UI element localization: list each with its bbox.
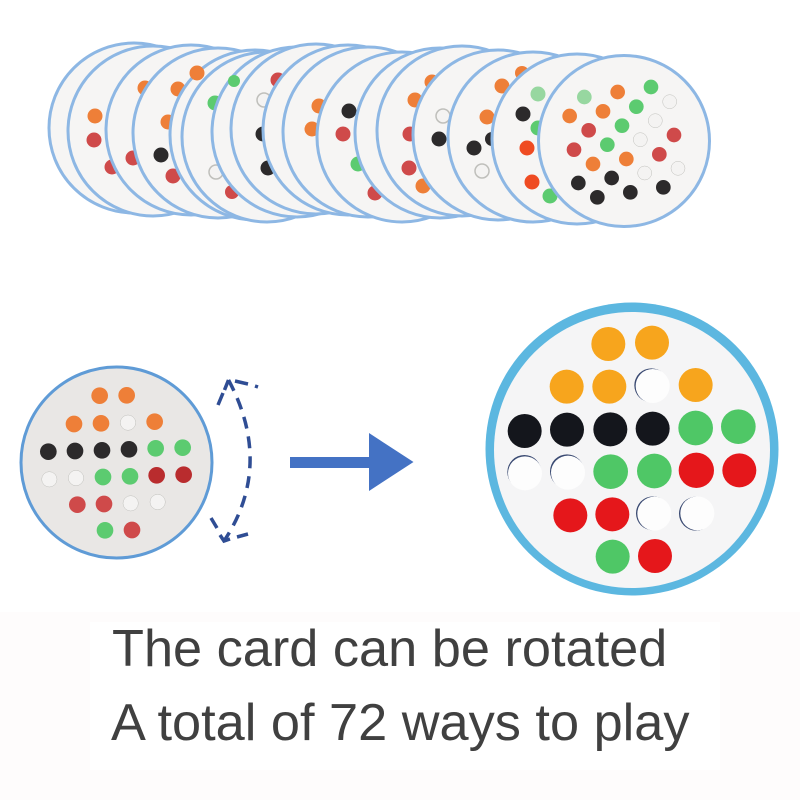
arrow: [290, 433, 414, 491]
card 2: [68, 46, 238, 216]
card 1: [49, 43, 219, 213]
caption line 1: The card can be rotated: [112, 620, 667, 678]
card 8: [231, 44, 401, 214]
card 7: [212, 47, 382, 217]
card 12: [355, 48, 525, 218]
card 15: [448, 52, 618, 222]
card 16: [492, 54, 662, 224]
caption line 2: A total of 72 ways to play: [111, 694, 690, 752]
card 5: [170, 50, 340, 220]
icon: dashed rotation arc: [211, 380, 258, 541]
card 13: [377, 46, 547, 216]
card 11: [317, 52, 487, 222]
card 14: [413, 50, 583, 220]
card 3: [106, 45, 276, 215]
front card: [538, 56, 710, 226]
stack of pattern cards: [49, 43, 710, 226]
card 9: [263, 45, 433, 215]
rotatable pattern card: [21, 367, 212, 558]
card 10: [283, 47, 453, 217]
card 4: [133, 48, 303, 218]
text band background: [0, 612, 800, 800]
felt board with pompoms: [486, 302, 778, 596]
card 6: [182, 52, 352, 222]
